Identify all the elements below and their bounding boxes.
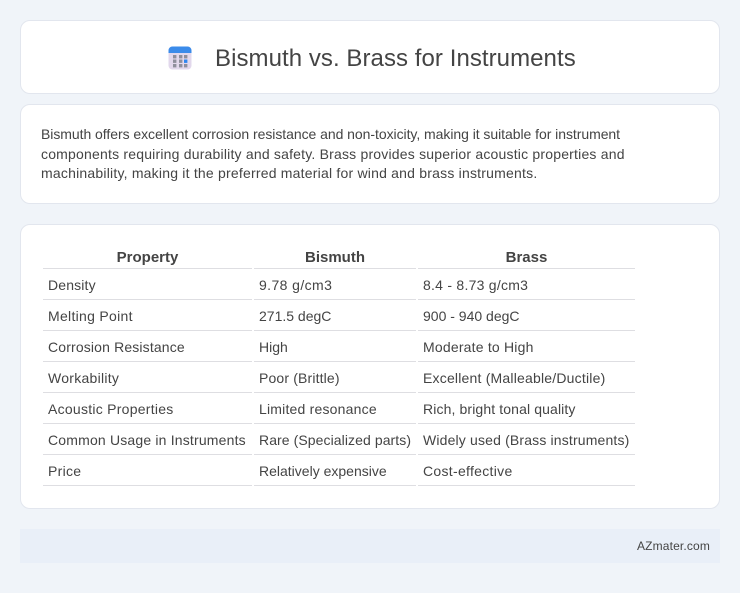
row: corrosion resistance: [43, 339, 635, 362]
row: melting point: [43, 308, 635, 331]
panel: summary text: [20, 104, 720, 204]
row: density: [43, 277, 635, 300]
row: corrosion resistance: Corrosion Resistance: [48, 339, 185, 355]
row: acoustic properties: [43, 401, 635, 424]
row: workability: Excellent (Malleable/Ductile): [423, 370, 605, 386]
row: acoustic properties: Acoustic Properties: [48, 401, 174, 417]
row: corrosion resistance: High: [259, 339, 288, 355]
row: melting point: Melting Point: [48, 308, 133, 324]
table header: [43, 249, 635, 269]
panel: comparison table: [20, 224, 720, 509]
row: density: Density: [48, 277, 96, 293]
summary paragraph: machinability, making it the preferred material for wind and brass instruments.: [41, 165, 537, 181]
row: common usage in instruments: Rare (Specialized parts): [259, 432, 411, 448]
row: price: Price: [48, 463, 81, 479]
table header: Bismuth: [305, 249, 365, 266]
row: melting point: 900 - 940 degC: [423, 308, 520, 324]
row: acoustic properties: Limited resonance: [259, 401, 377, 417]
footer bar: [20, 529, 720, 563]
title: Bismuth vs. Brass for Instruments: [215, 45, 576, 72]
summary paragraph: components requiring durability and safety. Brass provides superior acoustic properties and: [41, 146, 625, 162]
icon: calendar: [168, 46, 192, 70]
row: price: Cost-effective: [423, 463, 513, 479]
footer credit: AZmater.com: [637, 539, 710, 553]
summary paragraph: [41, 126, 625, 181]
row: acoustic properties: Rich, bright tonal quality: [423, 401, 576, 417]
row: corrosion resistance: Moderate to High: [423, 339, 534, 355]
table header: Property: [117, 249, 178, 266]
row: density: 8.4 - 8.73 g/cm3: [423, 277, 528, 293]
row: common usage in instruments: Common Usage in Instruments: [48, 432, 246, 448]
row: workability: [43, 370, 635, 393]
row: workability: Poor (Brittle): [259, 370, 340, 386]
row: workability: Workability: [48, 370, 119, 386]
row: common usage in instruments: [43, 432, 635, 455]
row: price: Relatively expensive: [259, 463, 387, 479]
row: common usage in instruments: Widely used (Brass instruments): [423, 432, 629, 448]
row: price: [43, 463, 635, 486]
row: melting point: 271.5 degC: [259, 308, 331, 324]
summary paragraph: Bismuth offers excellent corrosion resistance and non-toxicity, making it suitable for instrument: [41, 126, 620, 142]
header panel: [20, 20, 720, 94]
table header: Brass: [506, 249, 547, 266]
row: density: 9.78 g/cm3: [259, 277, 332, 293]
